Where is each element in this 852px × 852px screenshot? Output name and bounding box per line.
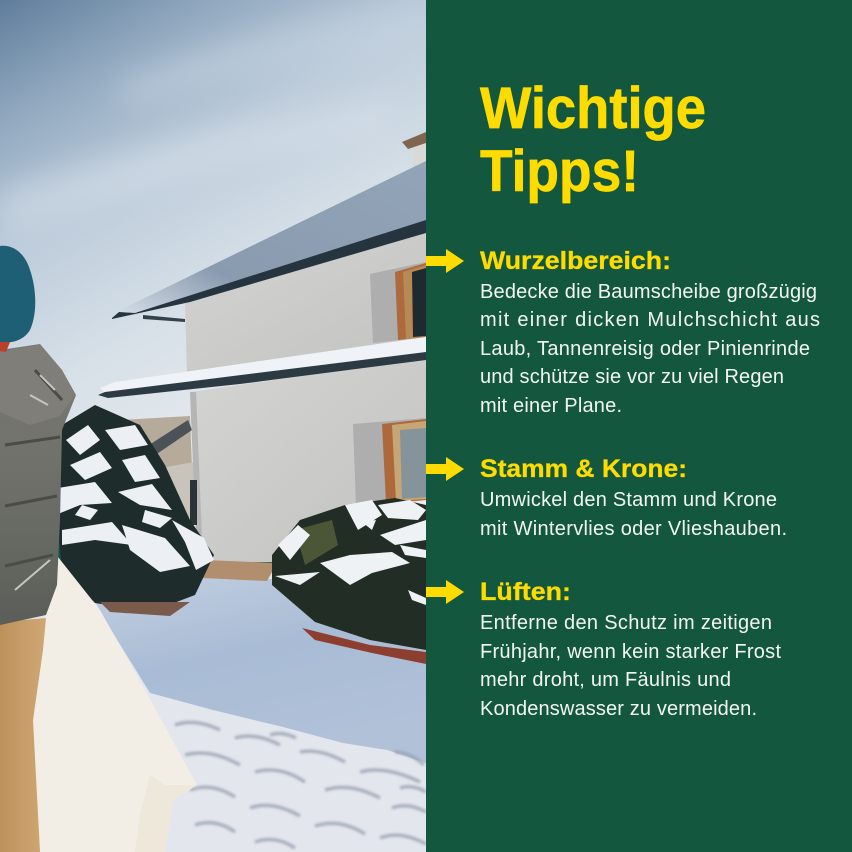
middle roof [100, 337, 426, 393]
tip: Lüften: Frühjahr, wenn kein starker Frost [480, 641, 781, 663]
chimney [413, 142, 426, 172]
tip: Lüften: mehr droht, um Fäulnis und [480, 669, 731, 691]
tip: Wurzelbereich: Bedecke die Baumscheibe großzügig [480, 281, 817, 303]
icon: arrow 1 [426, 249, 464, 273]
shaded snow [90, 576, 426, 763]
tip: Lüften [480, 578, 781, 720]
snowy ground [0, 570, 426, 852]
conifer left [55, 405, 214, 616]
gardener: trousers [0, 618, 46, 852]
icon: arrow 2 [426, 457, 464, 481]
tip: Stamm und Krone: mit Wintervlies oder Vlieshauben. [480, 518, 787, 540]
tip: Lüften: Kondenswasser zu vermeiden. [480, 698, 757, 720]
title: Tipps! [480, 139, 639, 204]
house upper wall [185, 232, 426, 373]
foundation strip [203, 560, 277, 581]
tip: Wurzelbereich: mit einer Plane. [480, 395, 622, 417]
distant house [120, 416, 194, 520]
snow texture [175, 722, 426, 848]
tip: Stamm und Krone: Umwickel den Stamm und Krone [480, 489, 777, 511]
upper window [370, 262, 426, 343]
tip: Wurzelbereich: Laub, Tannenreisig oder Pinienrinde [480, 338, 810, 360]
lower window [353, 418, 426, 506]
title [480, 76, 706, 204]
tip: Stamm und Krone [480, 455, 787, 540]
title: Wichtige [480, 76, 706, 141]
tip: Lüften: Entferne den Schutz im zeitigen [480, 612, 772, 634]
panel: green tips panel [426, 0, 852, 852]
white fleece [33, 557, 197, 852]
panel: winter photo of house with gardener [0, 0, 426, 852]
gardener: jacket [0, 344, 76, 625]
tip: Wurzelbereich: Wurzelbereich: [480, 247, 671, 275]
tip: Stamm und Krone: Stamm & Krone: [480, 455, 687, 483]
tip: Wurzelbereich [480, 247, 820, 417]
upper roof [120, 161, 426, 315]
tip: Wurzelbereich: mit einer dicken Mulchschicht aus [480, 309, 820, 331]
sky [0, 0, 426, 540]
house lower wall [190, 358, 426, 562]
tip: Wurzelbereich: und schütze sie vor zu viel Regen [480, 366, 784, 388]
gardener: beanie [0, 246, 35, 342]
tip: Lüften: Lüften: [480, 578, 571, 606]
shrub right [272, 498, 426, 664]
icon: arrow 3 [426, 580, 464, 604]
